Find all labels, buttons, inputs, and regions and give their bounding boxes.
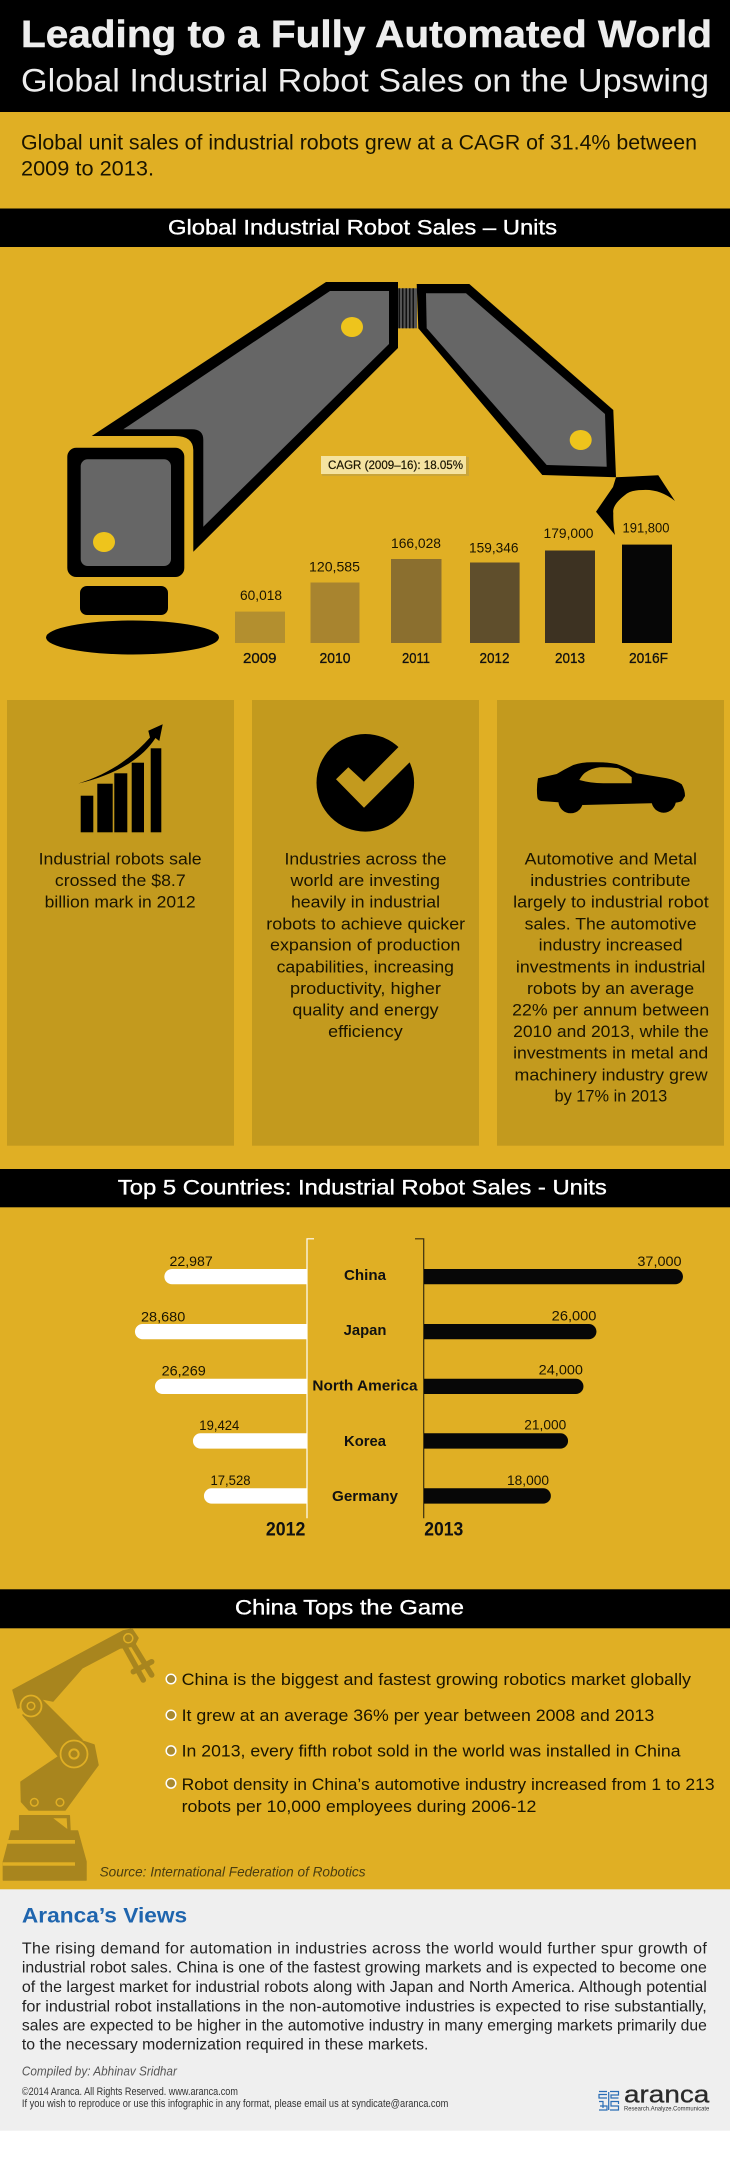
panel: industries investing: robots to achieve quicker <box>266 914 465 933</box>
views paragraph: industrial robot sales. China is one of the fastest growing markets and is expected to become one <box>22 1960 707 1977</box>
panel: industries investing: capabilities, increasing <box>277 957 454 976</box>
views paragraph: sales are expected to be higher in the automotive industry in many emerging markets primarily due <box>22 2017 707 2034</box>
callout: CAGR <box>321 456 469 476</box>
row: Japan <box>135 1307 597 1339</box>
row: Japan: 26,000 <box>552 1307 597 1323</box>
bar 2010: 2010 <box>320 650 350 667</box>
bar 2016F <box>622 520 672 667</box>
row: China: 37,000 <box>637 1253 682 1269</box>
panel: industries investing: expansion of production <box>270 936 460 955</box>
intro text: Global unit sales of industrial robots grew at a CAGR of 31.4% between <box>21 130 697 154</box>
panel: automotive and metal: investments in industrial <box>516 957 705 976</box>
views paragraph: for industrial robot installations in the non-automotive industries is expected to rise substantially, <box>22 1998 707 2015</box>
title banner: Global Industrial Robot Sales on the Upswing <box>21 62 709 98</box>
bar 2011: 2011 <box>402 650 430 667</box>
row: Korea <box>193 1417 568 1450</box>
section heading: top 5 countries: Top 5 Countries: Industrial Robot Sales - Units <box>118 1176 607 1199</box>
panel: automotive and metal: largely to industrial robot <box>513 893 709 912</box>
callout: CAGR: CAGR (2009–16): 18.05% <box>328 458 463 472</box>
bar 2010 <box>309 558 360 667</box>
bar 2016F: 191,800 <box>622 520 670 536</box>
bar 2009 <box>235 587 285 667</box>
logo: aranca <box>599 2082 710 2113</box>
section heading: global sales <box>0 208 730 247</box>
arm joint <box>398 288 417 328</box>
row: Japan: Japan <box>344 1322 386 1339</box>
upper arm <box>92 282 398 552</box>
row: Korea: 19,424 <box>199 1417 239 1433</box>
views paragraph: The rising demand for automation in industries across the world would further spur growth of <box>22 1940 707 1957</box>
bar 2009: 2009 <box>243 650 276 667</box>
bar 2011 <box>391 535 442 667</box>
panel: automotive and metal: 22% per annum between <box>512 1001 709 1020</box>
panel: automotive and metal: Automotive and Metal <box>525 849 697 868</box>
title banner: Leading to a Fully Automated World <box>21 14 712 56</box>
bar 2012: 159,346 <box>469 540 519 556</box>
bullet 2: It grew at an average 36% per year between 2008 and 2013 <box>182 1706 654 1725</box>
bar 2016F: 2016F <box>629 650 668 667</box>
row: China: China <box>344 1267 387 1284</box>
panel: sales crossed $8.7 billion: Industrial robots sale <box>39 849 202 868</box>
panel: industries investing <box>252 700 479 1146</box>
panel: automotive and metal: robots by an average <box>527 979 694 998</box>
views paragraph: to the necessary modernization required in these markets. <box>22 2036 428 2053</box>
panel: sales crossed $8.7 billion: crossed the $8.7 <box>55 871 186 890</box>
section heading: global sales: Global Industrial Robot Sales – Units <box>168 216 557 239</box>
row: Germany: 17,528 <box>210 1472 251 1488</box>
panel: automotive and metal: machinery industry grew <box>514 1065 708 1084</box>
row: North America: North America <box>312 1378 418 1395</box>
bullet list: China facts <box>166 1670 715 1816</box>
views paragraph <box>22 1940 707 2053</box>
panel: industries investing: heavily in industrial <box>291 893 440 912</box>
section heading: China tops the game <box>0 1589 730 1628</box>
copyright: If you wish to reproduce or use this infographic in any format, please email us at syndicate@aranca.com <box>22 2098 448 2110</box>
butterfly chart: countries <box>135 1239 683 1541</box>
bar 2013 <box>544 525 595 667</box>
bar 2010: 120,585 <box>309 558 360 574</box>
panel: automotive and metal: industry increased <box>539 936 683 955</box>
bar 2009: 60,018 <box>240 587 282 603</box>
logo: aranca: aranca <box>624 2082 710 2109</box>
bar 2012: 2012 <box>480 650 510 667</box>
bar 2011: 166,028 <box>391 535 441 551</box>
row: Korea: 21,000 <box>524 1417 566 1433</box>
compiled by: Compiled by: Abhinav Sridhar <box>22 2065 178 2079</box>
views heading: Aranca’s Views <box>22 1904 187 1927</box>
bullet 3: In 2013, every fifth robot sold in the world was installed in China <box>182 1742 681 1761</box>
panel: automotive and metal: 2010 and 2013, while the <box>513 1022 709 1041</box>
bullet 4: Robot density in China’s automotive industry increased from 1 to 213 <box>182 1775 715 1794</box>
section heading: China tops the game: China Tops the Game <box>235 1596 464 1619</box>
bar 2013: 179,000 <box>544 525 594 541</box>
forearm <box>417 284 616 477</box>
row: North America: 24,000 <box>539 1362 583 1378</box>
row: Korea: Korea <box>344 1433 387 1450</box>
intro text <box>21 130 697 180</box>
row: Japan: 28,680 <box>141 1308 186 1324</box>
panel: industries investing: world are investing <box>289 871 440 890</box>
row: China: 22,987 <box>170 1253 213 1269</box>
axis label 2012: 2012 <box>266 1520 305 1541</box>
panel: Aranca's views <box>0 1889 730 2131</box>
copyright <box>22 2086 448 2110</box>
icon: check mark <box>316 734 414 832</box>
illustration: robot arm <box>46 282 675 654</box>
icon: car <box>537 762 685 813</box>
row: North America <box>155 1362 583 1395</box>
bullet 1: China is the biggest and fastest growing robotics market globally <box>182 1670 692 1689</box>
panel: automotive and metal <box>497 700 724 1146</box>
panel: industries investing: quality and energy <box>292 1001 439 1020</box>
section heading: top 5 countries <box>0 1169 730 1207</box>
icon: rising bar chart <box>78 724 163 832</box>
panel: industries investing: efficiency <box>328 1022 403 1041</box>
panel: automotive and metal: investments in metal and <box>513 1044 708 1063</box>
bullet 4: robots per 10,000 employees during 2006-12 <box>182 1797 536 1816</box>
illustration: robot silhouette <box>3 1629 152 1880</box>
panel: automotive and metal: by 17% in 2013 <box>554 1087 667 1106</box>
row: North America: 26,269 <box>162 1362 206 1378</box>
panel: sales crossed $8.7 billion: billion mark in 2012 <box>45 893 196 912</box>
panel: sales crossed $8.7 billion <box>7 700 234 1146</box>
bullet 4 <box>166 1775 715 1816</box>
panel: automotive and metal: industries contribute <box>530 871 690 890</box>
views paragraph: of the largest market for industrial robots along with Japan and North America. Although potential <box>22 1979 707 1996</box>
source note: Source: International Federation of Robotics <box>100 1865 366 1880</box>
claw <box>596 475 675 535</box>
row: Germany: 18,000 <box>507 1472 549 1488</box>
panel: industries investing: Industries across the <box>284 849 446 868</box>
bar 2012 <box>469 540 520 667</box>
bar 2013: 2013 <box>555 650 585 667</box>
bar chart: unit sales <box>235 520 672 667</box>
row: China <box>164 1253 683 1284</box>
row: Germany: Germany <box>332 1488 399 1505</box>
axis label 2013: 2013 <box>424 1520 463 1541</box>
robot body <box>46 448 219 654</box>
panel: automotive and metal: sales. The automotive <box>525 914 696 933</box>
title banner <box>0 0 730 112</box>
row: Germany <box>204 1472 551 1505</box>
logo: aranca: Research.Analyze.Communicate <box>624 2106 710 2113</box>
panel: industries investing: productivity, higher <box>290 979 441 998</box>
intro text: 2009 to 2013. <box>21 156 154 180</box>
copyright: ©2014 Aranca. All Rights Reserved. www.aranca.com <box>22 2086 238 2098</box>
